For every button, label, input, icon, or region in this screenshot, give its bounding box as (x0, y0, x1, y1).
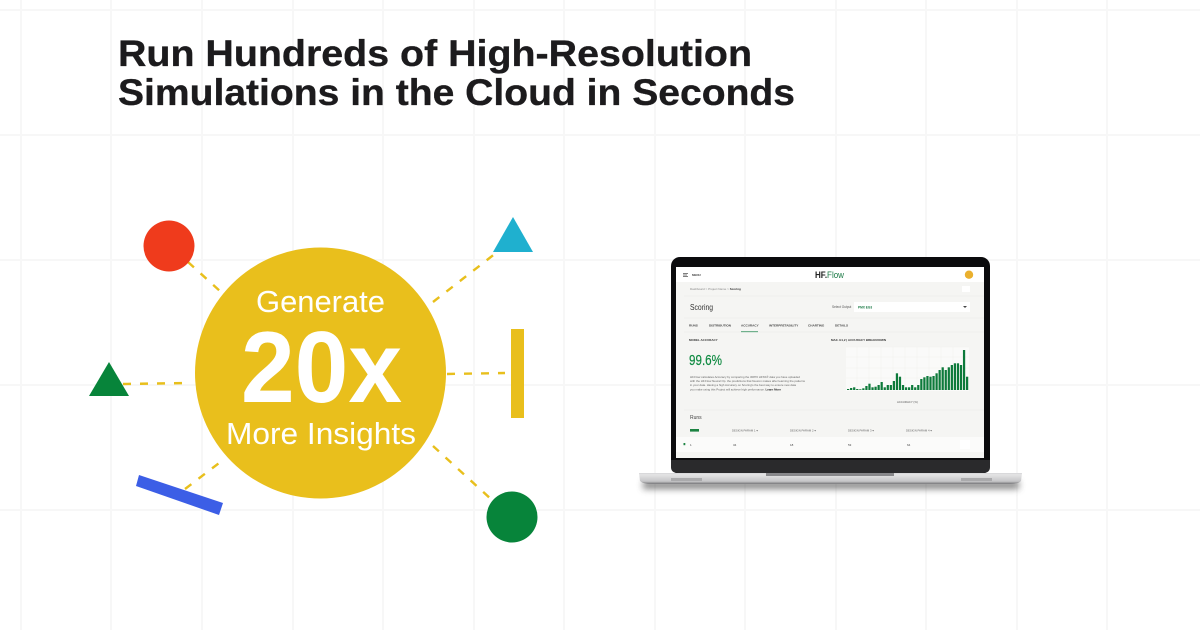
tabs: DISTRIBUTION (709, 324, 732, 328)
tabs: CHARTING (808, 324, 825, 328)
tabs: INTERPRETABILITY (769, 324, 799, 328)
laptop base (639, 473, 1022, 484)
dashed connectors (123, 253, 505, 500)
heading: scoring: Scoring (690, 303, 713, 312)
runs table: DESIGN PARAM 2 ▾ (790, 428, 816, 432)
breadcrumb: Dashboard > Project Name > Scoring (690, 287, 741, 291)
icon: blue triangle (493, 217, 533, 252)
laptop screen: Select Output (832, 305, 851, 309)
avatar (965, 270, 973, 279)
laptop screen: MODEL ACCURACY (689, 338, 718, 342)
accuracy description (690, 375, 806, 392)
title (118, 32, 795, 113)
accuracy description: with the HF.Flow Neural Op. the predictions that Neuron makes after learning the patterns (690, 379, 806, 383)
runs table: 53 (848, 443, 852, 447)
laptop shadow (643, 481, 1019, 489)
icon: blue bar (136, 475, 223, 515)
laptop screen: PMX EG3 (858, 306, 872, 310)
runs table: DESIGN PARAM 4 ▾ (906, 428, 932, 432)
laptop screen (676, 267, 984, 458)
title: Simulations in the Cloud in Seconds (118, 71, 795, 113)
runs table: 1 (690, 443, 692, 447)
runs table: 34 (733, 443, 737, 447)
title: Run Hundreds of High-Resolution (118, 32, 752, 74)
runs table: DESIGN PARAM 1 ▾ (732, 428, 758, 432)
callout: 20x more insights: More Insights (226, 416, 416, 451)
runs table (676, 415, 984, 452)
tabs: RUNS (689, 324, 698, 328)
laptop screen: MENU (692, 273, 701, 277)
callout: 20x more insights (195, 248, 446, 498)
icon: green circle (486, 492, 538, 542)
runs table: 64 (907, 443, 911, 447)
icon: green triangle (89, 362, 129, 396)
laptop (639, 257, 1022, 489)
tabs: ACCURACY (741, 324, 760, 328)
runs table: 18 (790, 443, 794, 447)
accuracy description: HF.Flow calculates Accuracy by comparing the 30870 HFSS® data you have uploaded (690, 375, 800, 379)
accuracy description: in your data. Having a high Accuracy on Scoring's the best way to ensure new data (690, 383, 796, 387)
tabs (689, 324, 848, 328)
runs table: Runs (690, 415, 702, 421)
callout: 20x more insights: Generate (256, 284, 385, 319)
icon: red circle (144, 220, 194, 272)
icon: yellow bar (511, 329, 524, 418)
bar chart (846, 347, 969, 404)
accuracy value: 99.6% (689, 353, 722, 369)
laptop lid (671, 257, 990, 474)
accuracy description: you make using this Project will achieve high performance. Learn More (690, 388, 781, 392)
bar chart: ACCURACY (%) (897, 400, 918, 404)
runs table: DESIGN PARAM 3 ▾ (848, 428, 874, 432)
logo: HF.Flow (815, 270, 844, 281)
tabs: DETAILS (835, 324, 848, 328)
callout: 20x more insights: 20x (241, 312, 402, 424)
laptop screen: MAX. E1,2 | ACCURACY BREAKDOWN (831, 338, 886, 342)
